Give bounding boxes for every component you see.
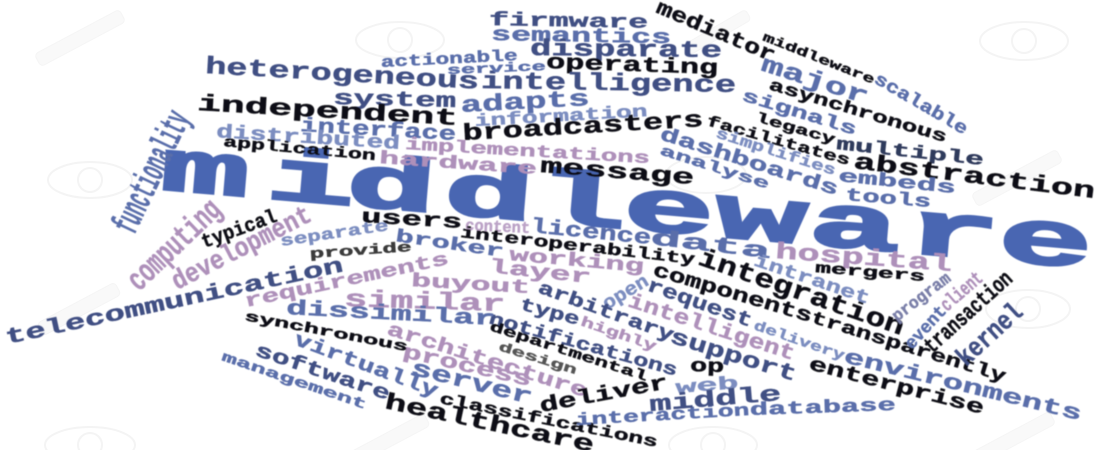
- headline word: middleware: middleware: [158, 125, 1096, 292]
- word: enterprise: enterprise: [806, 354, 986, 421]
- word: intelligence: intelligence: [481, 69, 736, 100]
- word: signals: signals: [739, 87, 859, 141]
- word: telecommunication: telecommunication: [3, 253, 346, 351]
- word: licence: licence: [529, 216, 652, 251]
- word: kernel: kernel: [952, 298, 1030, 374]
- word: typical: typical: [199, 206, 281, 255]
- word: support: support: [667, 325, 799, 388]
- word: op: op: [690, 355, 724, 378]
- word: delivery: delivery: [751, 319, 847, 365]
- word: application: application: [223, 134, 376, 165]
- word: hospital: hospital: [774, 239, 953, 278]
- word: virtually: virtually: [291, 329, 441, 404]
- word: type: type: [517, 295, 582, 331]
- word: interface: interface: [300, 115, 457, 147]
- word: design: design: [497, 339, 579, 378]
- word: major: major: [758, 52, 871, 112]
- word: development: development: [167, 201, 317, 298]
- word: arbitrary: arbitrary: [535, 277, 678, 347]
- word: operating: operating: [546, 52, 718, 81]
- word: web: web: [675, 374, 739, 399]
- word: independent: independent: [197, 91, 459, 132]
- word: disparate: disparate: [530, 36, 722, 64]
- word: middle: middle: [648, 382, 782, 418]
- word: process: process: [400, 341, 533, 393]
- word: implementations: implementations: [405, 136, 650, 169]
- word: dashboards: dashboards: [657, 124, 841, 202]
- word: server: server: [408, 356, 535, 411]
- word: highly: highly: [578, 315, 659, 356]
- word: architecture: architecture: [384, 319, 590, 404]
- word: layer: layer: [487, 256, 592, 290]
- word: analyse: analyse: [657, 143, 771, 194]
- word: service: service: [447, 59, 546, 78]
- word: multiple: multiple: [835, 135, 985, 171]
- word: interoperability: interoperability: [459, 224, 697, 269]
- word: intelligent: intelligent: [625, 291, 797, 367]
- word: mergers: mergers: [815, 260, 926, 286]
- word: actionable: actionable: [380, 47, 518, 72]
- word: tools: tools: [845, 186, 932, 213]
- word: system: system: [333, 88, 456, 114]
- word: distributed: distributed: [216, 121, 401, 155]
- word: integration: integration: [694, 243, 908, 343]
- word: interaction: interaction: [575, 402, 750, 431]
- word: buyout: buyout: [411, 270, 531, 299]
- word: legacy: legacy: [754, 110, 838, 149]
- word: working: working: [508, 244, 645, 278]
- word: requirements: requirements: [243, 248, 451, 313]
- word: healthcare: healthcare: [383, 389, 596, 450]
- word: classifications: classifications: [438, 390, 659, 450]
- word: components: components: [650, 260, 815, 329]
- word: notifications: notifications: [486, 310, 680, 382]
- word: request: request: [644, 275, 755, 333]
- word: content: content: [465, 217, 531, 238]
- word: database: database: [750, 396, 896, 421]
- word: information: information: [474, 103, 648, 132]
- word: embeds: embeds: [837, 167, 957, 199]
- word: heterogeneous: heterogeneous: [205, 54, 480, 97]
- word: semantics: semantics: [491, 24, 671, 50]
- word: asynchronous: asynchronous: [766, 77, 949, 148]
- word: environments: environments: [841, 346, 1084, 427]
- word: client: client: [937, 268, 989, 317]
- word: separate: separate: [279, 217, 390, 251]
- word: broadcasters: broadcasters: [462, 107, 704, 147]
- word: message: message: [539, 154, 695, 191]
- word: similar: similar: [344, 287, 506, 319]
- word: hardware: hardware: [379, 149, 538, 180]
- word: simplifies: simplifies: [713, 126, 838, 180]
- word: firmware: firmware: [489, 9, 648, 34]
- word: abstraction: abstraction: [852, 149, 1096, 205]
- word: transparently: transparently: [808, 309, 1008, 388]
- word: event: event: [902, 302, 952, 354]
- word: management: management: [219, 350, 368, 414]
- word: departmental: departmental: [487, 320, 649, 386]
- word: transaction: transaction: [919, 266, 1018, 359]
- word: users: users: [361, 206, 463, 235]
- word: scalable: scalable: [870, 70, 971, 140]
- word: software: software: [252, 340, 393, 407]
- word: middleware (small): middleware: [761, 30, 877, 88]
- word: computing: computing: [120, 192, 230, 299]
- word: synchronous: synchronous: [243, 309, 409, 356]
- word: broker: broker: [394, 227, 505, 263]
- word: adapts: adapts: [460, 86, 590, 119]
- word: data: data: [649, 226, 772, 265]
- word: facilitates: facilitates: [705, 113, 852, 170]
- word: open: open: [599, 271, 653, 315]
- word: dissimilar: dissimilar: [286, 298, 496, 332]
- word: provide: provide: [309, 240, 412, 263]
- word: program: program: [889, 270, 955, 327]
- word: deliver: deliver: [538, 372, 670, 419]
- word: intranet: intranet: [751, 252, 872, 309]
